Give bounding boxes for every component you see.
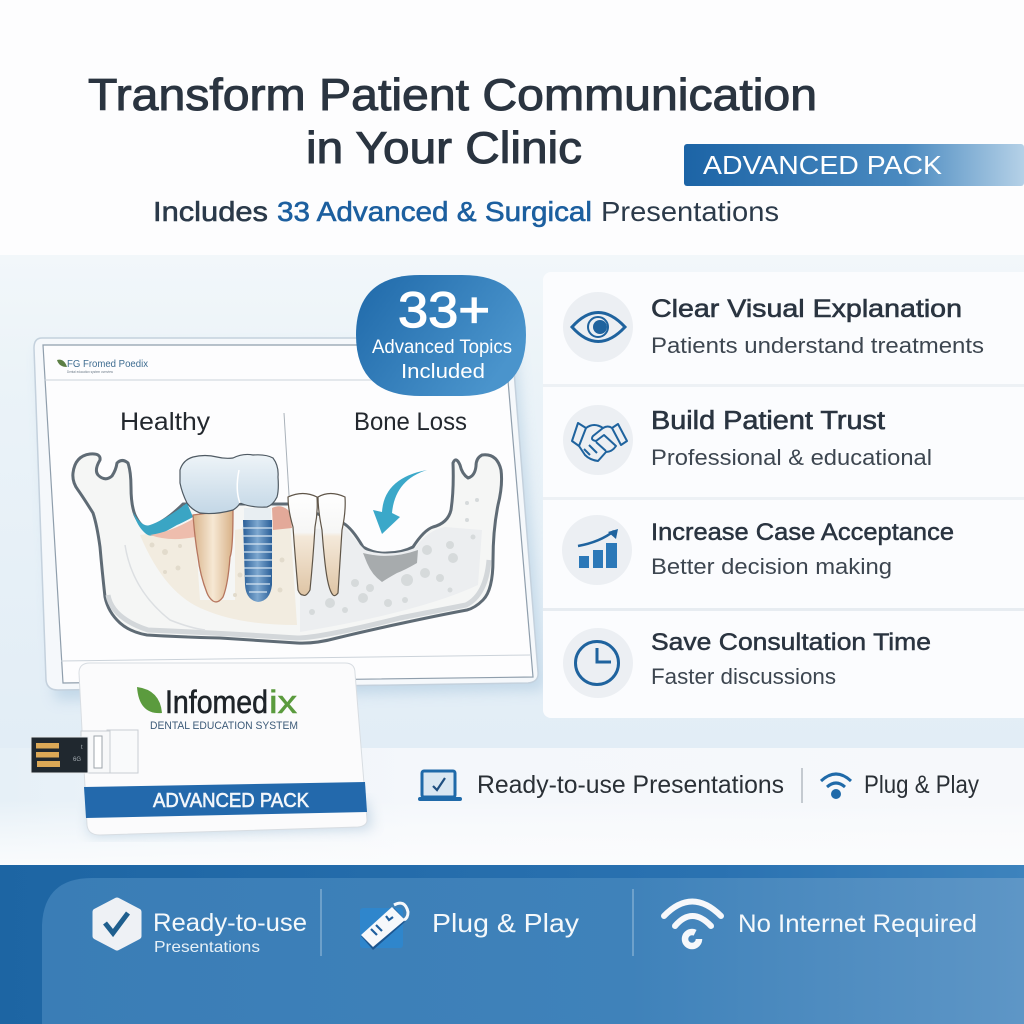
jaw illustration [73, 454, 502, 643]
footer item: ready-to-use: Ready-to-use [153, 909, 307, 937]
footer item: no internet [664, 902, 977, 946]
title: Transform Patient Communication [88, 71, 817, 120]
icon: clock [576, 642, 618, 684]
badge: advanced pack: ADVANCED PACK [703, 150, 943, 180]
benefit: save consultation time: Save Consultation Time [651, 629, 931, 656]
feature row: Plug & Play [864, 771, 979, 799]
tablet screen [34, 338, 545, 700]
callout: 33+: 33+ [398, 282, 490, 338]
footer item: plug and play: Plug & Play [432, 908, 579, 938]
benefit: increase case acceptance: Better decision making [651, 554, 892, 579]
footer item: ready-to-use [96, 901, 307, 956]
badge: advanced pack [684, 144, 1024, 186]
logo tagline: DENTAL EDUCATION SYSTEM [150, 720, 298, 732]
usb connector: t [81, 745, 83, 751]
title: in Your Clinic [306, 124, 582, 173]
feature row: Ready-to-use Presentations [477, 771, 784, 799]
panel: benefits [543, 272, 1024, 718]
footer item: no internet: No Internet Required [738, 910, 977, 938]
tablet logo: Dental education system overview [67, 370, 113, 374]
logo: Infomed [165, 684, 268, 720]
logo: ix [269, 684, 297, 720]
icon: wifi [664, 902, 721, 946]
benefit: save consultation time [563, 628, 931, 698]
benefit: increase case acceptance: Increase Case Acceptance [651, 519, 954, 546]
crown [180, 454, 278, 514]
footer item: plug and play [360, 903, 579, 950]
subtitle [153, 196, 779, 227]
label: healthy: Healthy [120, 408, 211, 436]
benefit: build patient trust: Professional & educational [651, 445, 932, 470]
title [88, 71, 817, 173]
icon: growth chart [578, 529, 618, 568]
tablet logo [57, 359, 148, 374]
callout: 33+: Included [401, 361, 485, 383]
benefit: build patient trust [563, 405, 932, 475]
icon: handshake [572, 423, 627, 461]
tablet logo: FG Fromed Poedix [67, 359, 148, 370]
callout: 33+ [356, 275, 526, 396]
natural teeth [288, 494, 317, 595]
tooth root [193, 510, 233, 602]
feature row [418, 768, 979, 803]
subtitle: Includes [153, 196, 268, 227]
blue stripe [84, 782, 367, 818]
benefit: increase case acceptance [562, 515, 954, 585]
benefit: save consultation time: Faster discussions [651, 664, 836, 689]
usb connector [31, 730, 138, 773]
jaw lower shading [108, 560, 489, 638]
right bone [300, 527, 482, 632]
subtitle: 33 Advanced & Surgical [277, 196, 592, 227]
footer band [0, 865, 1024, 1024]
arrow: bone loss [373, 470, 427, 534]
icon: check [96, 901, 138, 947]
benefit: clear visual explanation [563, 292, 984, 362]
icon: usb stick [360, 903, 408, 950]
icon: wifi plug [821, 774, 851, 798]
callout: 33+: Advanced Topics [372, 337, 512, 358]
left bone [140, 520, 297, 625]
usb card [31, 663, 372, 835]
implant [244, 508, 271, 521]
icon: eye [572, 312, 625, 342]
benefit: build patient trust: Build Patient Trust [651, 407, 885, 435]
subtitle: Presentations [601, 196, 779, 227]
footer item: ready-to-use: Presentations [154, 939, 260, 956]
card label: ADVANCED PACK [153, 790, 310, 812]
icon: laptop [418, 771, 462, 801]
usb connector: 6G [73, 757, 81, 763]
gum [133, 503, 193, 536]
benefit: clear visual explanation: Clear Visual Explanation [651, 295, 962, 323]
benefit: clear visual explanation: Patients understand treatments [651, 333, 984, 358]
bone loss patch [363, 550, 418, 582]
label: bone loss: Bone Loss [354, 408, 467, 436]
